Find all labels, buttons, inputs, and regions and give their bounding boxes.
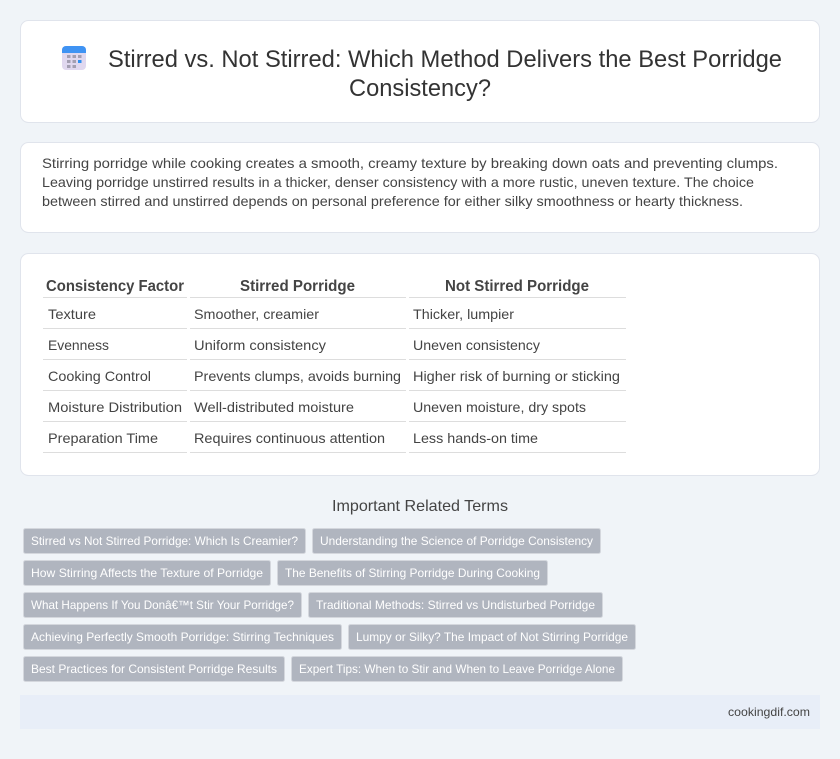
table row: preparation time [48,430,538,446]
tag [24,656,284,682]
tag [24,528,306,554]
icon: calendar [62,46,86,70]
tag: Stirred vs Not Stirred Porridge: Which Is Creamier? [31,534,298,548]
tag [24,560,270,586]
table row: cooking control: Higher risk of burning or sticking [413,368,620,384]
panel: related term tags [24,528,636,682]
tag: What Happens If You Donâ€™t Stir Your Porridge? [31,598,294,612]
table row: moisture distribution: Uneven moisture, dry spots [413,399,586,415]
tag [348,624,636,650]
table row: moisture distribution [48,399,586,415]
tag: Understanding the Science of Porridge Consistency [320,534,593,548]
title [108,46,782,102]
table row: moisture distribution: Well-distributed moisture [194,399,354,415]
table row: evenness: Uneven consistency [413,337,540,353]
tag: How Stirring Affects the Texture of Porridge [31,566,263,580]
table header [46,278,589,295]
text block: introduction [42,155,778,209]
tag: Achieving Perfectly Smooth Porridge: Stirring Techniques [31,630,334,644]
heading: related terms: Important Related Terms [332,498,508,515]
title: Stirred vs. Not Stirred: Which Method Delivers the Best Porridge [108,46,782,73]
table row: preparation time: Less hands-on time [413,430,538,446]
text block: introduction: Leaving porridge unstirred results in a thicker, denser consistency with a more rustic, uneven texture. The choice [42,174,754,190]
tag: Expert Tips: When to Stir and When to Leave Porridge Alone [299,662,615,676]
text block: introduction: between stirred and unstirred depends on personal preference for either silky smoothness or hearty thickness. [42,193,743,209]
table header: Consistency Factor [46,278,184,295]
text block: introduction: Stirring porridge while cooking creates a smooth, creamy texture by breaking down oats and preventing clumps. [42,155,778,171]
table row: cooking control: Prevents clumps, avoids burning [194,368,401,384]
tag [24,624,342,650]
tag: Best Practices for Consistent Porridge Results [31,662,277,676]
table row: texture [48,306,514,322]
table header: Not Stirred Porridge [445,278,589,295]
footer: cookingdif.com [728,705,810,719]
tag: The Benefits of Stirring Porridge During Cooking [285,566,540,580]
table row: preparation time: Preparation Time [48,430,158,446]
table row: cooking control: Cooking Control [48,368,151,384]
table row: texture: Smoother, creamier [194,306,319,322]
table row: cooking control [48,368,620,384]
table row: moisture distribution: Moisture Distribution [48,399,182,415]
tag [312,528,600,554]
panel: comparison table [20,254,820,476]
table row: texture: Thicker, lumpier [413,306,514,322]
table row: preparation time: Requires continuous attention [194,430,385,446]
tag [24,592,302,618]
table row: evenness: Uniform consistency [194,337,326,353]
table header: Stirred Porridge [240,278,355,295]
title: Consistency? [349,75,491,102]
tag [292,656,622,682]
tag: Lumpy or Silky? The Impact of Not Stirring Porridge [356,630,628,644]
table row: texture: Texture [48,306,96,322]
footer [20,695,820,729]
table row: evenness: Evenness [48,337,109,353]
tag: Traditional Methods: Stirred vs Undisturbed Porridge [316,598,595,612]
panel: title card [20,20,820,122]
tag [278,560,548,586]
tag [308,592,602,618]
panel: introduction [20,142,820,232]
table row: evenness [48,337,540,353]
